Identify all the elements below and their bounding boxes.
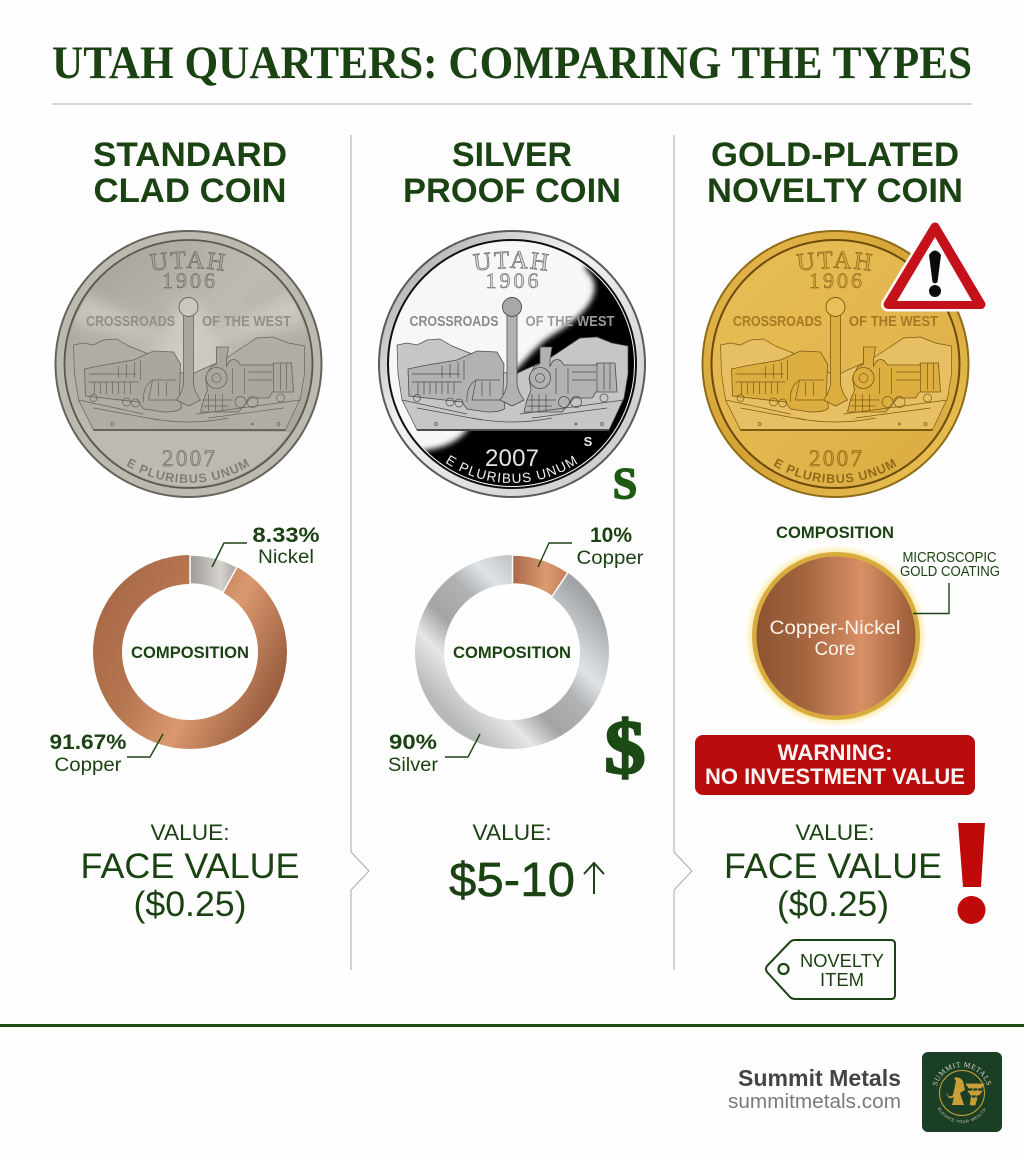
- value: standard coin: VALUE:: [150, 820, 230, 845]
- value: silver proof coin: $5-10: [449, 854, 575, 907]
- callout: warning no investment value: NO INVESTMENT VALUE: [705, 764, 965, 789]
- divider: between standard and silver with chevron: [351, 135, 369, 970]
- icon: Summit Metals logo: ELEVATE YOUR WEALTH: [938, 1108, 986, 1123]
- heading: silver proof coin: [403, 136, 621, 210]
- label: microscopic gold coating: MICROSCOPIC: [902, 550, 996, 566]
- label: copper share: 91.67%: [50, 731, 127, 754]
- panel: standard clad coin: [50, 136, 322, 924]
- chart: copper-nickel core with gold coating: Core: [814, 638, 856, 660]
- callout: warning no investment value: WARNING:: [778, 740, 892, 765]
- coin: gold-plated Utah quarter: E PLURIBUS UNUM: [774, 458, 896, 483]
- label: microscopic gold coating: GOLD COATING: [900, 564, 1000, 580]
- value: silver proof coin: [449, 820, 604, 907]
- heading: silver proof coin: SILVER: [452, 136, 572, 174]
- label: silver share: Silver: [388, 755, 439, 776]
- coin: silver proof Utah quarter: 1906: [486, 268, 538, 293]
- coin: standard clad Utah quarter: UTAH: [149, 251, 226, 271]
- value: standard coin: [80, 820, 300, 924]
- callout: warning no investment value: [695, 735, 975, 795]
- label: copper share: Copper: [54, 755, 122, 776]
- coin: gold-plated Utah quarter: OF THE WEST: [849, 314, 938, 330]
- chart: silver coin composition donut: [430, 555, 594, 734]
- label: nickel share: Nickel: [258, 547, 314, 568]
- value: standard coin: ($0.25): [134, 885, 246, 924]
- value: gold-plated coin: VALUE:: [796, 820, 874, 845]
- footer: [0, 1024, 1024, 1132]
- panel: silver proof coin: [378, 136, 646, 907]
- icon: S mint mark: S: [613, 459, 637, 508]
- value: gold-plated coin: FACE VALUE: [724, 847, 942, 886]
- coin: silver proof Utah quarter: S: [584, 434, 593, 449]
- icon: dollar sign: $: [604, 706, 646, 790]
- coin: standard clad Utah quarter: E PLURIBUS UNUM: [126, 458, 250, 483]
- coin: standard clad Utah quarter: 2007: [162, 446, 215, 471]
- coin: silver proof Utah quarter: CROSSROADS: [410, 314, 499, 330]
- label: copper share: [50, 731, 163, 776]
- coin: silver proof Utah quarter: E PLURIBUS UNUM: [446, 455, 578, 483]
- label: microscopic gold coating: [900, 550, 1000, 614]
- coin: gold-plated Utah quarter: 1906: [809, 268, 862, 293]
- label: copper share: 10%: [590, 524, 632, 547]
- coin: standard clad Utah quarter: OF THE WEST: [202, 314, 291, 330]
- text: brand name and website: [728, 1065, 901, 1113]
- icon: up arrow: [584, 863, 604, 894]
- icon: Summit Metals logo: [922, 1052, 1002, 1132]
- icon: novelty item tag: NOVELTY: [800, 951, 884, 971]
- chart: copper-nickel core with gold coating: [749, 549, 923, 723]
- label: silver share: [388, 731, 480, 776]
- chart: standard coin composition donut: COMPOSITION: [131, 644, 249, 662]
- coin: gold-plated Utah quarter: CROSSROADS: [733, 314, 822, 330]
- heading: silver proof coin: PROOF COIN: [403, 172, 621, 210]
- label: silver share: 90%: [389, 731, 437, 754]
- coin: gold-plated Utah quarter: 2007: [809, 446, 862, 471]
- label: nickel share: [212, 524, 320, 568]
- label: copper share: [538, 524, 644, 569]
- heading: standard clad coin: CLAD COIN: [94, 172, 286, 210]
- heading: gold-plated novelty coin: GOLD-PLATED: [711, 136, 959, 174]
- coin: gold-plated Utah quarter: UTAH: [796, 251, 873, 271]
- chart: copper-nickel core with gold coating: Copper-Nickel: [770, 617, 900, 639]
- coin: standard clad Utah quarter: CROSSROADS: [86, 314, 175, 330]
- coin: silver proof Utah quarter: OF THE WEST: [526, 314, 615, 330]
- icon: Summit Metals logo: SUMMIT METALS: [932, 1062, 992, 1086]
- heading: standard clad coin: STANDARD: [93, 136, 287, 174]
- icon: red exclamation mark: [958, 823, 986, 924]
- title: UTAH QUARTERS: COMPARING THE TYPES: [52, 37, 972, 89]
- panel: gold-plated novelty coin: [695, 136, 1000, 1000]
- chart: silver coin composition donut: COMPOSITION: [453, 644, 571, 662]
- value: silver proof coin: VALUE:: [472, 820, 552, 845]
- coin: silver proof Utah quarter: [378, 230, 646, 498]
- chart: standard coin composition donut: [108, 555, 272, 734]
- label: copper share: Copper: [576, 548, 644, 569]
- label: nickel share: 8.33%: [252, 524, 320, 547]
- icon: warning triangle: [888, 227, 981, 304]
- coin: silver proof Utah quarter: 2007: [485, 445, 539, 472]
- coin: standard clad Utah quarter: 1906: [162, 268, 215, 293]
- value: gold-plated coin: [724, 820, 942, 924]
- heading: standard clad coin: [93, 136, 287, 210]
- heading: gold-plated novelty coin: [707, 136, 963, 210]
- text: brand name and website: summitmetals.com: [728, 1091, 901, 1113]
- value: standard coin: FACE VALUE: [80, 847, 300, 886]
- coin: standard clad Utah quarter: [54, 230, 322, 498]
- text: brand name and website: Summit Metals: [738, 1065, 901, 1091]
- icon: novelty item tag: [766, 940, 895, 999]
- icon: novelty item tag: ITEM: [820, 970, 864, 990]
- coin: gold-plated Utah quarter: [702, 230, 970, 498]
- heading: gold-plated novelty coin: NOVELTY COIN: [707, 172, 963, 210]
- label: composition: COMPOSITION: [776, 524, 894, 542]
- divider: between silver and gold-plated with chevron: [674, 135, 692, 970]
- coin: silver proof Utah quarter: UTAH: [472, 251, 550, 271]
- value: gold-plated coin: ($0.25): [777, 885, 889, 924]
